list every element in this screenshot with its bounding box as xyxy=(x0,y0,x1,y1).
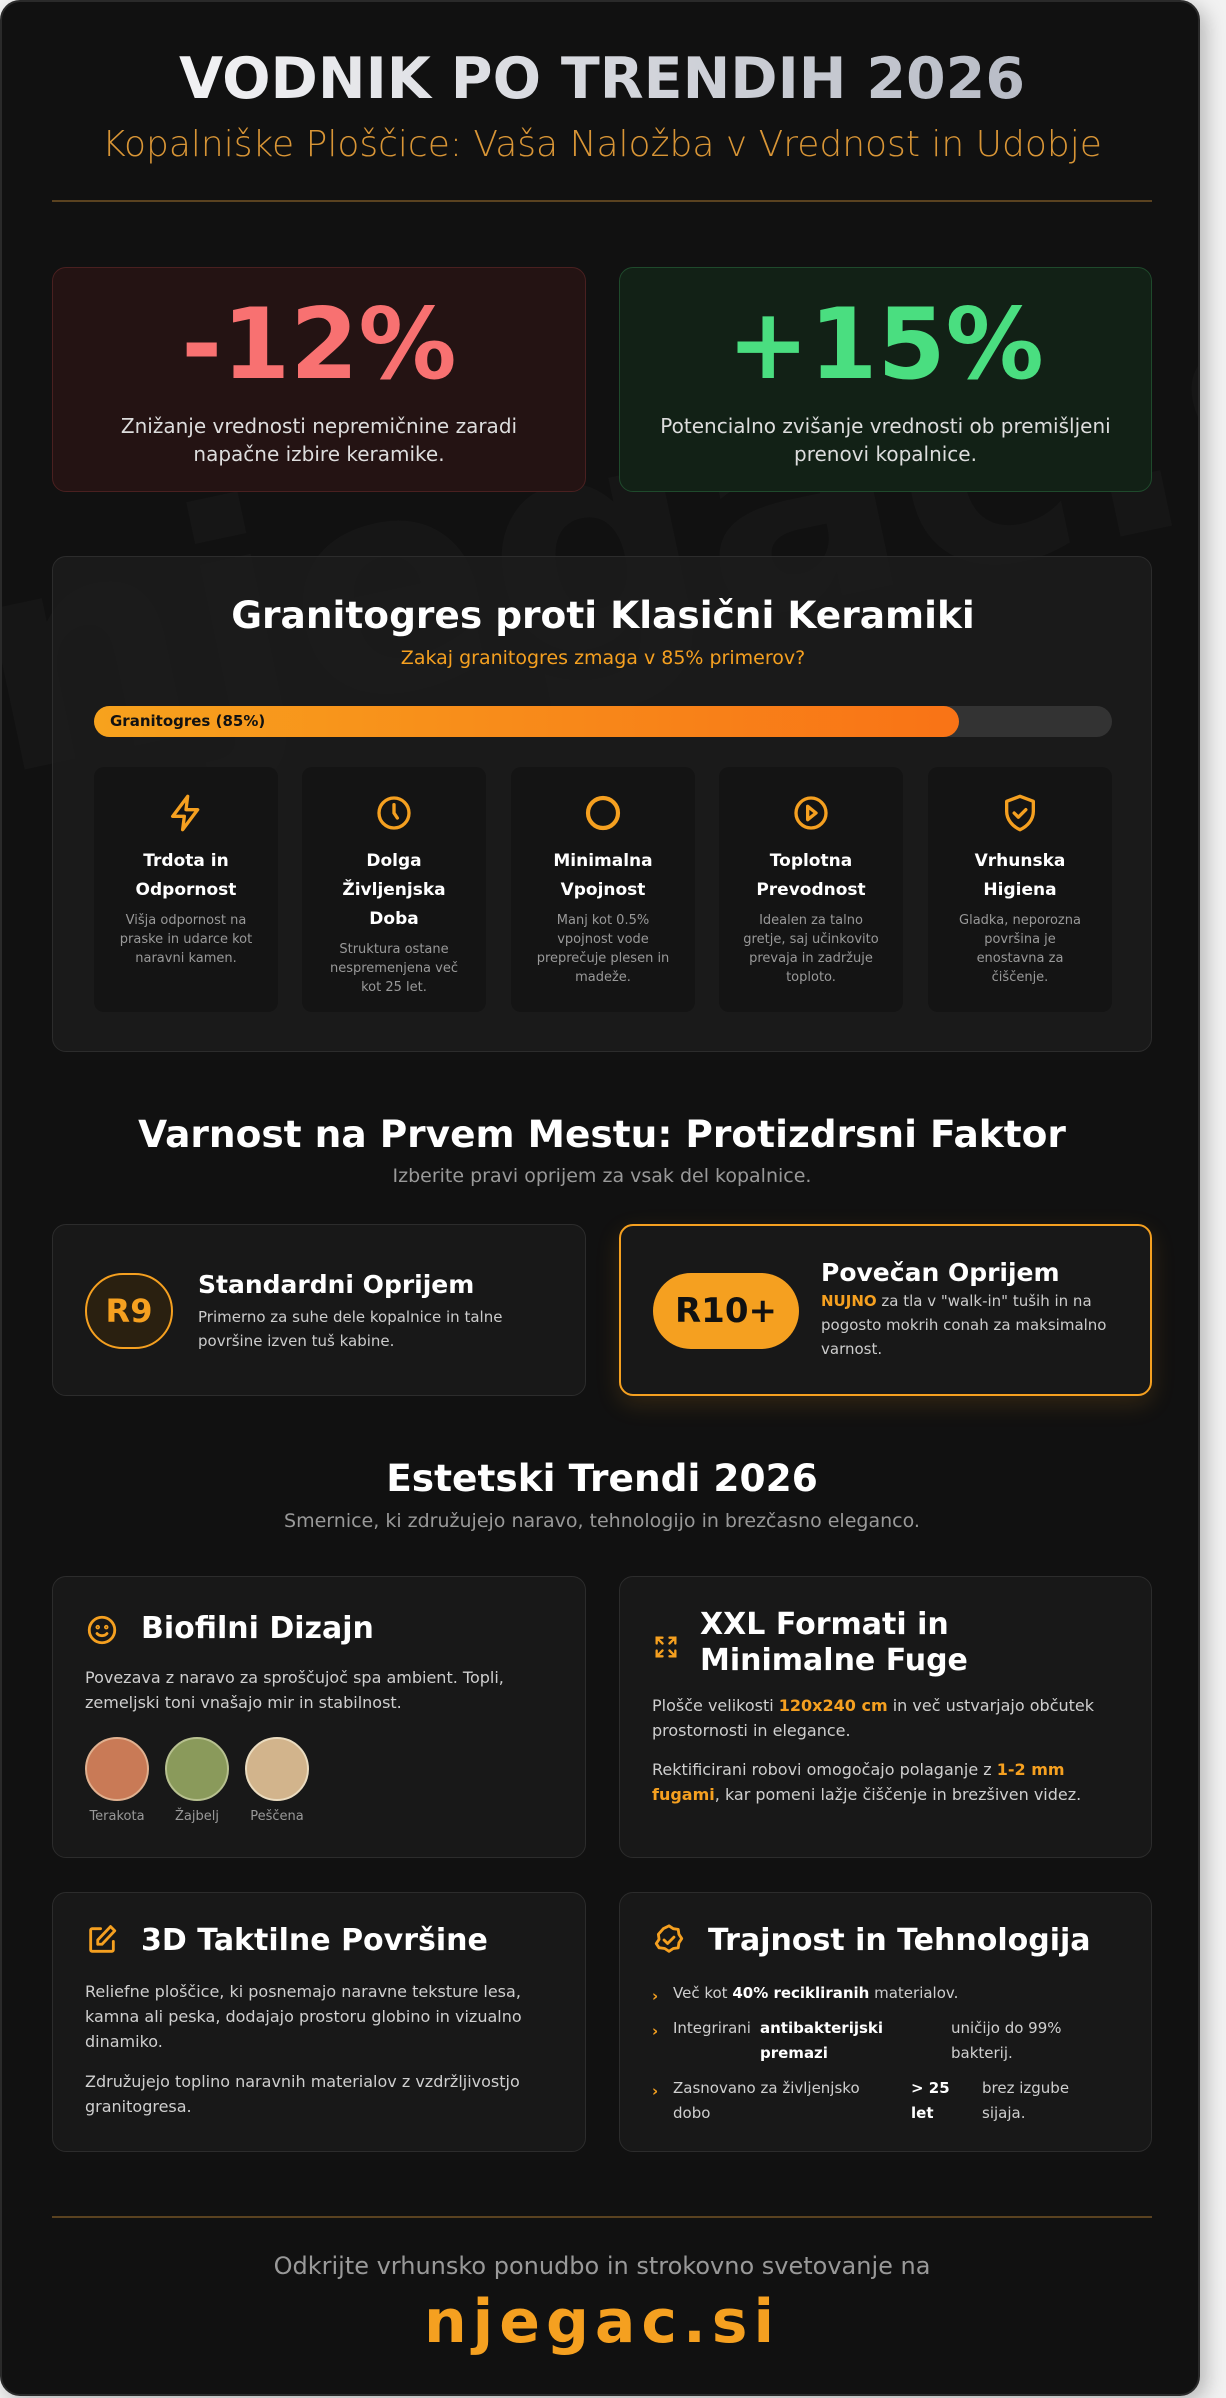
progress bar xyxy=(94,706,1112,737)
card: XXL xyxy=(619,1576,1152,1858)
feature: Trdota: Višja odpornost na praske in udarce kot naravni kamen. xyxy=(120,913,252,966)
subheading: Zakaj granitogres zmaga v 85% primerov? xyxy=(401,647,805,669)
stat card: +15% xyxy=(619,267,1152,492)
bullet list: › xyxy=(652,1987,658,2005)
text R10+: NUJNO za tla v "walk-in" tuših in na pogosto mokrih conah za maksimalno varnost. xyxy=(821,1292,1106,1358)
card: Trajnost xyxy=(619,1892,1152,2152)
text R9: Standardni Oprijem xyxy=(198,1270,474,1299)
heading: safety: Varnost na Prvem Mestu: Protizdrsni Faktor xyxy=(138,1112,1066,1156)
card: XXL: Plošče velikosti 120x240 cm in več ustvarjajo občutek prostornosti in elegance. xyxy=(652,1696,1094,1740)
feature: Toplotna: Toplotna xyxy=(770,851,852,871)
icon: expand xyxy=(655,1636,677,1658)
heading: Granitogres proti Klasični Keramiki xyxy=(231,593,975,637)
card: R9 xyxy=(52,1224,586,1396)
subheading: trends: Smernice, ki združujejo naravo, tehnologijo in brezčasno eleganco. xyxy=(284,1510,920,1532)
card: Biofilni: Povezava z naravo za sproščujoč spa ambient. Topli, zemeljski toni vnašajo mir in stabilnost. xyxy=(85,1668,504,1712)
bullet list: uničijo do 99% bakterij. xyxy=(951,2019,1062,2062)
title: VODNIK PO TRENDIH 2026 xyxy=(179,46,1025,112)
feature: Toplotna: Prevodnost xyxy=(756,880,866,900)
feature: Dolga doba xyxy=(302,767,486,1012)
card: XXL: XXL Formati in xyxy=(700,1607,949,1642)
feature: Higiena xyxy=(928,767,1112,1012)
stat card: -12%: -12% xyxy=(181,288,457,402)
bullet list: brez izgube sijaja. xyxy=(982,2079,1069,2122)
heading: trends: Estetski Trendi 2026 xyxy=(386,1456,818,1500)
text R10+ xyxy=(821,1258,1106,1358)
card: Biofilni: Biofilni Dizajn xyxy=(141,1611,374,1646)
bullet list: antibakterijski premazi xyxy=(760,2019,883,2062)
feature: Vpojnost: Minimalna xyxy=(553,851,653,871)
text R9: Primerno za suhe dele kopalnice in talne površine izven tuš kabine. xyxy=(198,1308,502,1350)
feature: Higiena: Gladka, neporozna površina je enostavna za čiščenje. xyxy=(959,913,1081,985)
card: 3D: 3D Taktilne Površine xyxy=(141,1923,488,1958)
icon: smile xyxy=(88,1616,116,1644)
subtitle: Kopalniške Ploščice: Vaša Naložba v Vrednost in Udobje xyxy=(102,124,1102,165)
card: 3D: Reliefne ploščice, ki posnemajo naravne teksture lesa, kamna ali peska, dodajajo prostoru globino in vizualno dinamiko. xyxy=(85,1982,522,2051)
feature: Dolga doba: Življenjska xyxy=(342,880,446,900)
card: 3D xyxy=(52,1892,586,2152)
stat card: +15%: +15% xyxy=(727,288,1044,402)
badge R10+: R10+ xyxy=(675,1291,777,1331)
feature: Higiena: Vrhunska xyxy=(975,851,1065,871)
progress bar: Granitogres (85%) xyxy=(110,712,265,730)
icon: badge check xyxy=(654,1924,684,1953)
icon: edit xyxy=(89,1925,116,1953)
subheading: safety: Izberite pravi oprijem za vsak del kopalnice. xyxy=(393,1165,811,1187)
card: 3D: Združujejo toplino naravnih materialov z vzdržljivostjo granitogresa. xyxy=(85,2072,520,2116)
stat card: -12% xyxy=(52,267,586,492)
feature: Dolga doba: Doba xyxy=(369,909,419,929)
text R9 xyxy=(198,1270,502,1350)
feature: Vpojnost: Vpojnost xyxy=(561,880,645,900)
bullet list: › xyxy=(652,2082,658,2100)
bullet list: Integrirani xyxy=(673,2019,751,2037)
feature: Trdota: Trdota in xyxy=(143,851,229,871)
bullet list: › xyxy=(652,2022,658,2040)
feature: Dolga doba: Struktura ostane nespremenjena več kot 25 let. xyxy=(330,942,458,995)
stat card: -12%: Znižanje vrednosti nepremičnine zaradi napačne izbire keramike. xyxy=(121,414,517,466)
card: Trajnost: Trajnost in Tehnologija xyxy=(708,1923,1091,1958)
footer text: Odkrijte vrhunsko ponudbo in strokovno svetovanje na xyxy=(274,2252,930,2280)
feature: Toplotna xyxy=(719,767,903,1012)
badge R9: R9 xyxy=(106,1292,152,1330)
bullet list xyxy=(652,1984,1069,2122)
badge R10+ xyxy=(653,1273,799,1349)
badge R9 xyxy=(85,1273,173,1349)
color swatches xyxy=(85,1737,309,1824)
card: XXL: Rektificirani robovi omogočajo polaganje z 1-2 mm fugami, kar pomeni lažje čiščenje in brezšiven videz. xyxy=(652,1760,1081,1804)
feature: Trdota: Odpornost xyxy=(136,880,236,900)
feature: Toplotna: Idealen za talno gretje, saj učinkovito prevaja in zadržuje toploto. xyxy=(743,913,879,985)
stat card: +15%: Potencialno zvišanje vrednosti ob premišljeni prenovi kopalnice. xyxy=(660,414,1111,466)
panel: granitogres comparison xyxy=(52,556,1152,1052)
card: Biofilni xyxy=(52,1576,586,1858)
feature: Vpojnost: Manj kot 0.5% vpojnost vode preprečuje plesen in madeže. xyxy=(537,913,669,985)
feature: Higiena: Higiena xyxy=(983,880,1057,900)
bullet list: Zasnovano za življenjsko dobo xyxy=(673,2079,860,2122)
feature: Dolga doba: Dolga xyxy=(366,851,422,871)
card: R10+ xyxy=(619,1224,1152,1396)
color swatches: Žajbelj xyxy=(175,1809,219,1824)
card: XXL: Minimalne Fuge xyxy=(700,1643,968,1678)
bullet list: > 25 let xyxy=(911,2079,950,2122)
color swatches: Terakota xyxy=(89,1809,145,1824)
color swatches: Peščena xyxy=(250,1809,304,1824)
feature: Vpojnost xyxy=(511,767,695,1012)
feature: Trdota xyxy=(94,767,278,1012)
bullet list: Več kot 40% recikliranih materialov. xyxy=(673,1984,958,2002)
text R10+: Povečan Oprijem xyxy=(821,1258,1060,1287)
footer brand: njegac.si xyxy=(424,2287,780,2357)
